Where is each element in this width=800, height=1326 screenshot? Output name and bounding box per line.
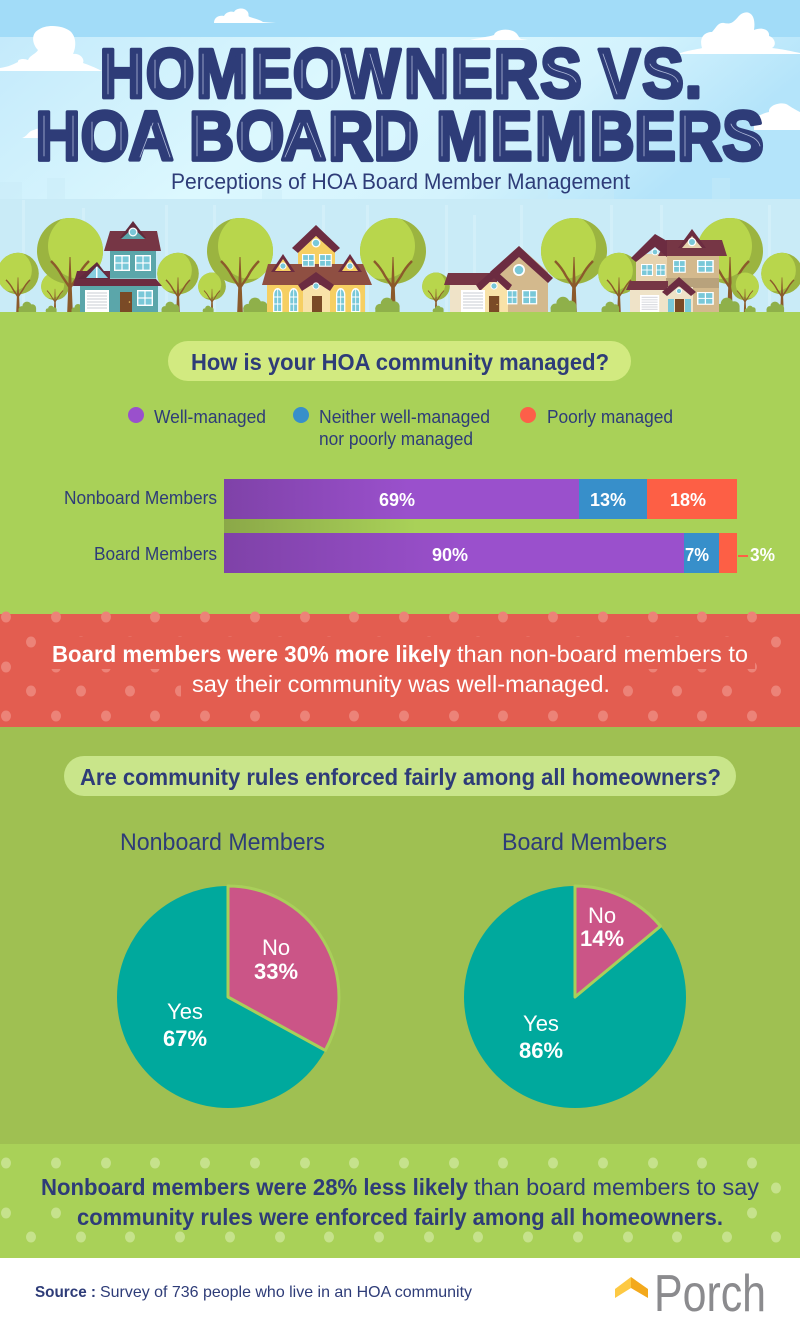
house: tall tan: [626, 229, 727, 313]
subtitle: Perceptions of HOA Board Member Management: [171, 169, 630, 194]
cloud: right lower: [754, 103, 800, 130]
legend: [128, 407, 673, 449]
pie chart: nonboard members: 33%: [254, 959, 298, 984]
house: teal: [73, 221, 162, 312]
callout: nonboard members 28%: [0, 1144, 800, 1258]
pie chart: board members: 14%: [580, 926, 624, 951]
bar: board members: 90%: [432, 545, 468, 565]
title: [35, 34, 764, 175]
panel: rules enforced fairly: [0, 727, 800, 1144]
pie chart: nonboard members: Nonboard Members: [120, 829, 325, 856]
bushes: [19, 297, 784, 313]
pie chart: nonboard members: Yes: [167, 999, 203, 1024]
question pill: Are community rules enforced fairly among all homeowners?: [80, 764, 721, 790]
pie chart: board members: Board Members: [502, 829, 667, 856]
pie chart: board members: [464, 829, 686, 1108]
pie chart: nonboard members: [117, 829, 339, 1108]
bar: nonboard members: 69%: [379, 490, 415, 510]
pie chart: board members: No: [588, 903, 616, 928]
question pill: How is your HOA community managed?: [191, 349, 609, 375]
cloud: upper centre small: [470, 30, 528, 40]
pie chart: board members: 86%: [519, 1038, 563, 1063]
legend: Neither well-managed: [319, 407, 490, 427]
title: HOA BOARD MEMBERS: [35, 97, 764, 175]
bar: nonboard members: Nonboard Members: [64, 488, 217, 508]
panel: how is your community managed: [0, 312, 800, 614]
legend: Poorly managed: [547, 407, 673, 427]
callout: nonboard members 28%: Nonboard members were 28% less likely: [41, 1174, 468, 1200]
skyline silhouettes: [0, 178, 730, 202]
question pill: [168, 341, 631, 381]
legend: nor poorly managed: [319, 429, 473, 449]
clouds: [0, 8, 800, 138]
callout: board members 30%: [0, 612, 800, 727]
legend: Well-managed: [154, 407, 266, 427]
cloud: left: [0, 26, 102, 71]
bar: board members: Board Members: [94, 544, 217, 564]
bar: board members: 3%: [750, 545, 775, 565]
logo: Porch: Porch: [654, 1265, 766, 1323]
bar: nonboard members: 13%: [590, 490, 626, 510]
callout: board members 30%: Board members were 30% more likely: [52, 641, 451, 667]
house: yellow: [262, 225, 372, 312]
callout: nonboard members 28%: community rules were enforced fairly among all homeowners.: [77, 1204, 723, 1230]
cloud: top middle: [214, 8, 276, 23]
callout: board members 30%: say their community was well-managed.: [192, 671, 610, 697]
source: Source :: [35, 1284, 96, 1301]
house: tan: [444, 246, 553, 313]
bar: board members: [94, 533, 775, 573]
bar: nonboard members: 18%: [670, 490, 706, 510]
pie chart: board members: Yes: [523, 1011, 559, 1036]
question pill: [64, 756, 736, 796]
bar: board members: 7%: [685, 545, 709, 565]
cloud: left lower: [22, 128, 50, 138]
bar chart: [64, 479, 775, 573]
callout: board members 30%: than non-board members to: [457, 641, 748, 667]
footer: [0, 1258, 800, 1326]
sky background: [0, 0, 800, 312]
callout: nonboard members 28%: than board members to say: [474, 1174, 760, 1200]
trees behind houses: [0, 213, 800, 312]
cloud: right: [678, 12, 800, 54]
source: Survey of 736 people who live in an HOA community: [100, 1284, 472, 1301]
title: HOMEOWNERS VS.: [99, 34, 702, 112]
logo: Porch: [615, 1265, 766, 1323]
title inline highlights: [44, 54, 760, 157]
pie chart: nonboard members: 67%: [163, 1026, 207, 1051]
bar: nonboard members: [64, 479, 737, 519]
pie chart: nonboard members: No: [262, 935, 290, 960]
